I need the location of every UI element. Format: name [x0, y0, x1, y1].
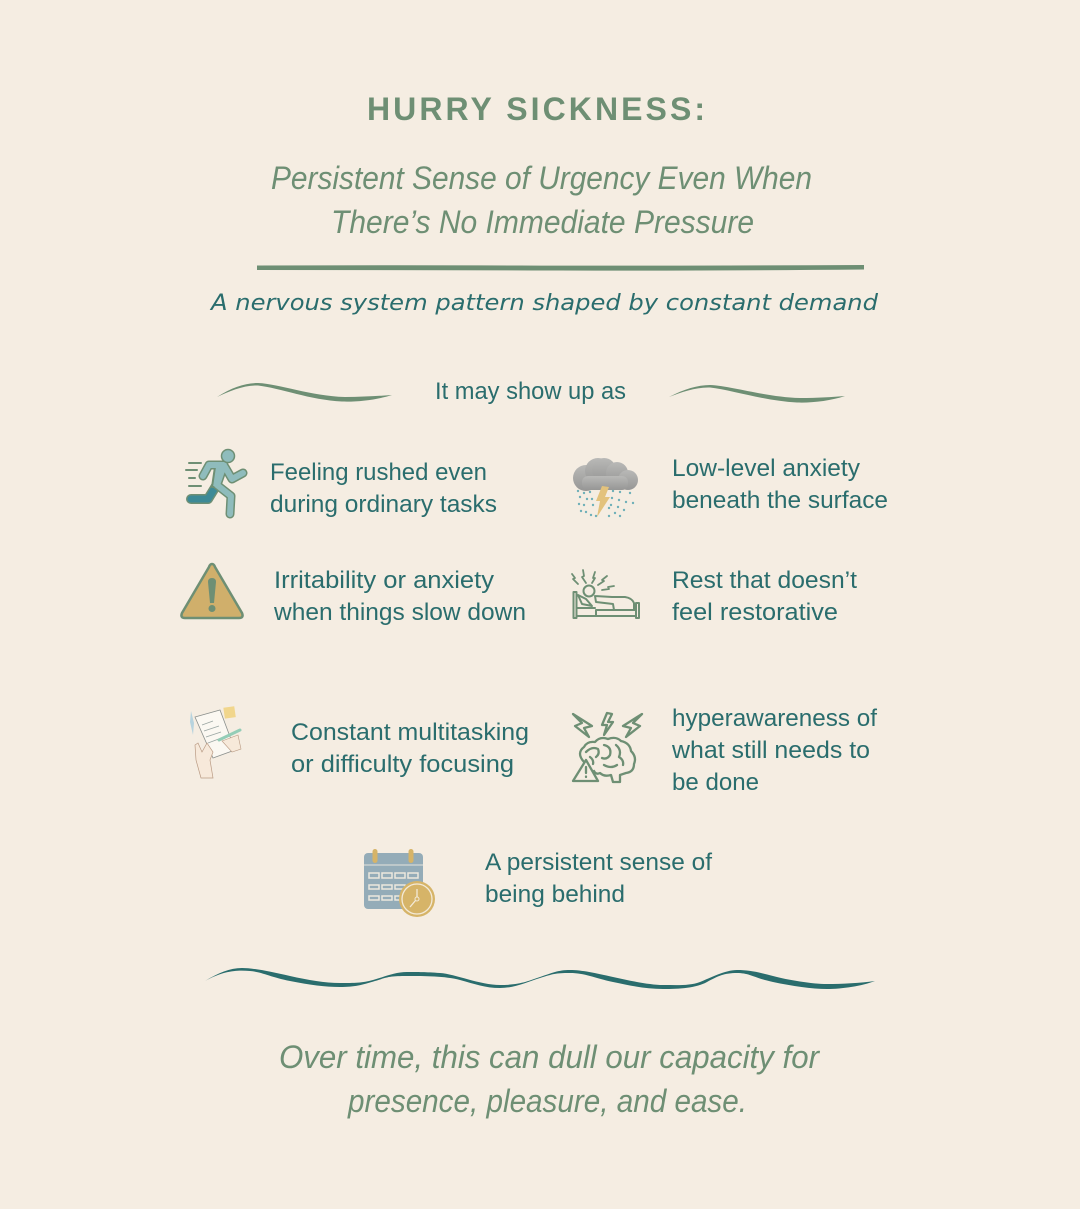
subtitle [271, 160, 812, 240]
closing statement [279, 1039, 820, 1119]
item: being behind [364, 849, 712, 917]
item: rest [572, 567, 857, 626]
tagline: A nervous system pattern shaped by constant demand [209, 291, 879, 316]
text: A persistent sense of [485, 849, 712, 876]
text: be done [672, 769, 759, 796]
item: multitasking [190, 706, 529, 778]
subtitle: Persistent Sense of Urgency Even When [271, 160, 812, 196]
closing statement: Over time, this can dull our capacity for [279, 1039, 820, 1075]
text: Rest that doesn’t [672, 567, 857, 594]
text [270, 459, 497, 518]
icon: person in bed [572, 570, 639, 618]
text: or difficulty focusing [291, 751, 514, 778]
text [291, 719, 529, 778]
text [273, 567, 526, 626]
text: hyperawareness of [672, 705, 877, 732]
text: Feeling rushed even [270, 459, 487, 486]
wave divider [205, 968, 875, 989]
item: low-level anxiety [573, 455, 888, 517]
text: beneath the surface [672, 487, 888, 514]
text: Constant multitasking [291, 719, 529, 746]
icon: warning triangle [181, 564, 243, 618]
icon: calendar and clock [364, 849, 435, 917]
text [485, 849, 712, 908]
title: HURRY SICKNESS: [367, 91, 705, 127]
icon: hands holding checklist [190, 706, 241, 778]
icon: running figure [186, 450, 243, 514]
text [672, 455, 888, 514]
item: feeling rushed [186, 450, 497, 518]
item: hyperawareness [573, 705, 877, 796]
text: Low-level anxiety [672, 455, 860, 482]
text: Irritability or anxiety [274, 567, 494, 594]
icon: brain with alerts [573, 713, 642, 782]
divider brush stroke [257, 265, 864, 271]
text: being behind [485, 881, 625, 908]
section heading: It may show up as [435, 378, 626, 405]
closing statement: presence, pleasure, and ease. [347, 1083, 747, 1119]
text: what still needs to [671, 737, 870, 764]
subtitle: There’s No Immediate Pressure [331, 204, 754, 240]
text [671, 705, 877, 796]
text: when things slow down [273, 599, 526, 626]
left swash [217, 383, 392, 402]
text [672, 567, 857, 626]
right swash [669, 385, 845, 403]
icon: storm cloud [573, 458, 638, 517]
text: during ordinary tasks [270, 491, 497, 518]
item: irritability [181, 564, 526, 626]
text: feel restorative [672, 599, 838, 626]
